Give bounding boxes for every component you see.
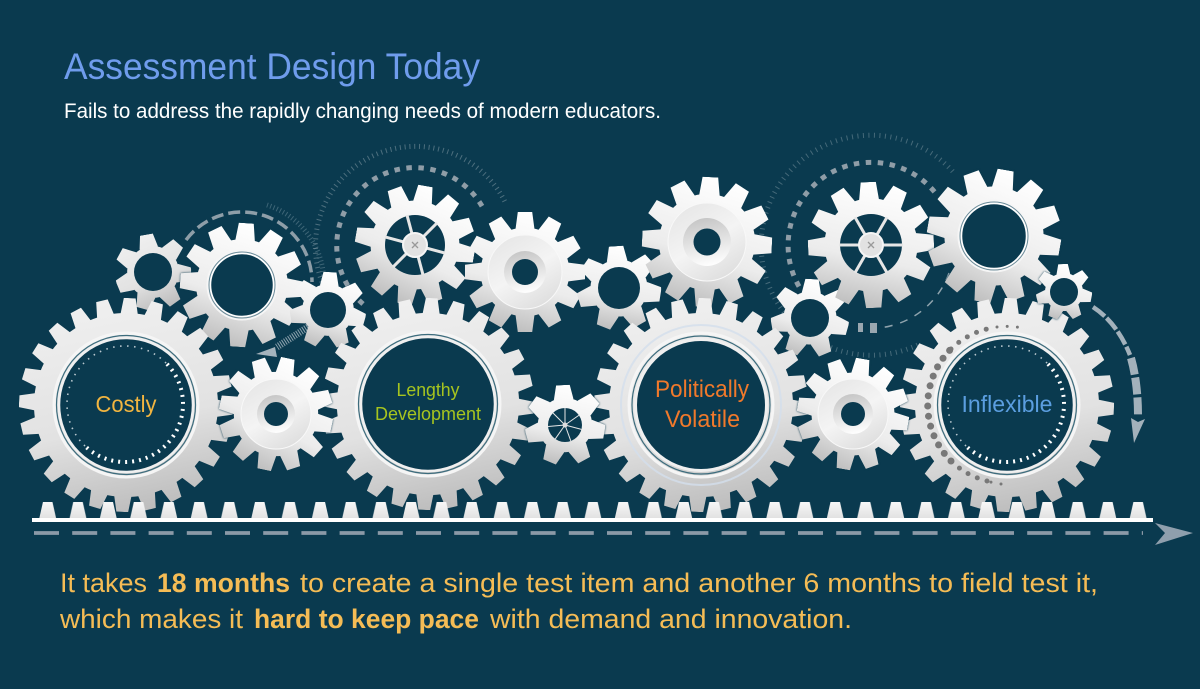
caption line 2: with demand and innovation. [489, 604, 852, 634]
label: Lengthy Development: Lengthy [396, 380, 460, 400]
caption line 1: It takes [60, 568, 147, 598]
gear: hub lower-right [795, 358, 910, 470]
gear: hub lower-left [218, 357, 334, 471]
label: Politically Volatile: Volatile [665, 406, 740, 433]
gear: left spoke wheel [354, 184, 474, 304]
label: Politically Volatile [655, 376, 749, 433]
curved arrow at right [1093, 307, 1145, 443]
gear: Costly [15, 294, 237, 516]
gear: hub top centre [639, 174, 775, 310]
gear: Inflexible [896, 294, 1118, 516]
gear: small top-left [116, 234, 192, 310]
caption line 2: which makes it [59, 604, 244, 634]
gear: Lengthy Development [318, 294, 538, 514]
gear: small spoke between big gears [523, 383, 607, 467]
caption line 2 [59, 604, 852, 634]
caption line 1: 18 months [157, 568, 290, 598]
gear: right spoke wheel [805, 179, 937, 311]
label: Inflexible: Inflexible [962, 391, 1053, 417]
caption line 1: to create a single test item and another 6 months to field test it, [300, 568, 1098, 598]
label: Lengthy Development: Development [375, 404, 481, 424]
dotted rings around left spoke gear [315, 146, 506, 304]
gear: tiny right [1035, 263, 1093, 321]
gear: Politically Volatile [590, 294, 812, 516]
gear: small link [288, 270, 368, 350]
dashed arc around upper-left gear with arrow [186, 205, 324, 357]
caption line 2: hard to keep pace [254, 604, 479, 634]
subtitle: Fails to address the rapidly changing needs of modern educators. [64, 100, 661, 123]
gear: small right [769, 277, 851, 359]
gear: open ring upper-right [926, 168, 1062, 304]
gear: small middle [577, 246, 662, 330]
rack with teeth [32, 502, 1153, 522]
label: Lengthy Development [375, 380, 481, 424]
timeline arrow [34, 523, 1193, 545]
gear: open ring upper-left [178, 222, 302, 348]
gear: hub top middle [465, 212, 585, 332]
label: Costly: Costly [96, 391, 157, 417]
dotted rings around right spoke gear [761, 135, 955, 355]
label: Politically Volatile: Politically [655, 376, 749, 403]
title: Assessment Design Today [64, 46, 480, 87]
